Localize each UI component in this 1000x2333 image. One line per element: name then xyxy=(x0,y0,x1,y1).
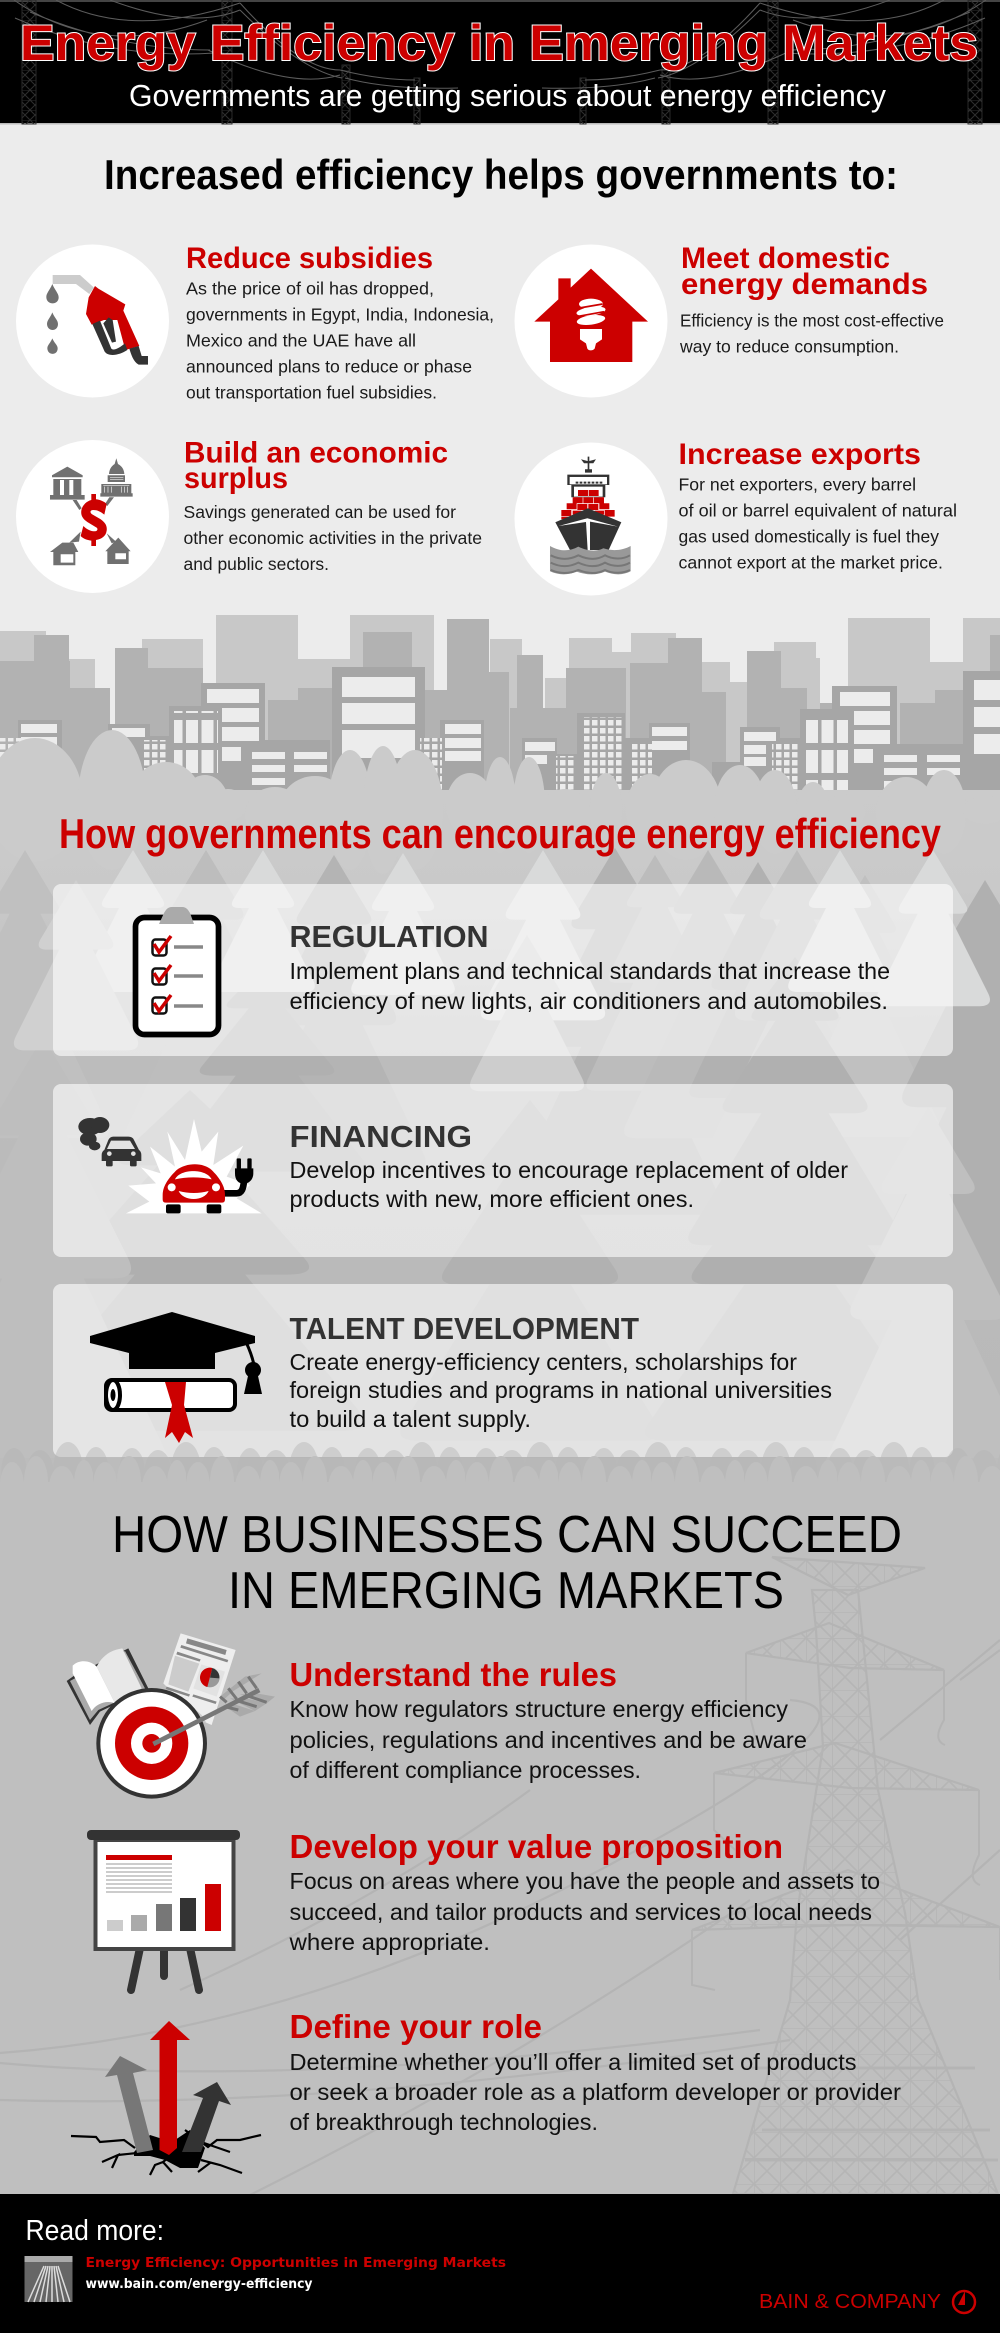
mid buildings xyxy=(0,619,1000,803)
body text xyxy=(184,502,482,574)
description: Create energy-efficiency centers, scholarships for xyxy=(290,1349,797,1375)
panel: financing xyxy=(53,1084,953,1257)
heading xyxy=(184,436,448,495)
pylon and power lines xyxy=(0,1557,1000,2195)
description xyxy=(290,1349,832,1432)
city skyline xyxy=(0,615,1000,805)
body text: Mexico and the UAE have all xyxy=(186,330,416,350)
body text: out transportation fuel subsidies. xyxy=(186,382,437,402)
background pine trees xyxy=(0,848,1000,1500)
heading: energy demands xyxy=(681,268,928,301)
body text: of oil or barrel equivalent of natural xyxy=(678,500,957,520)
icon: house with bulb xyxy=(514,244,668,398)
section heading: how businesses: IN EMERGING MARKETS xyxy=(228,1562,784,1620)
body text: Focus on areas where you have the people and assets to xyxy=(290,1868,880,1894)
icon: graduation cap xyxy=(90,1312,262,1443)
report url: www.bain.com/energy-efficiency xyxy=(86,2276,313,2292)
heading: Meet domestic xyxy=(681,242,890,275)
body text: where appropriate. xyxy=(288,1929,490,1955)
body text xyxy=(290,1696,807,1783)
report title: Energy Efficiency: Opportunities in Emerging Markets xyxy=(86,2255,506,2271)
read more label: Read more: xyxy=(26,2215,164,2247)
body text: Savings generated can be used for xyxy=(184,502,456,522)
heading: Reduce subsidies xyxy=(186,242,433,275)
body text xyxy=(288,1868,880,1955)
icon: money flows xyxy=(16,440,169,593)
description: Develop incentives to encourage replacement of older xyxy=(290,1157,848,1183)
icon: arrows breaking ground xyxy=(71,2021,261,2175)
description xyxy=(290,1157,848,1212)
section heading: increased efficiency: Increased efficiency helps governments to: xyxy=(104,151,898,198)
body text: of breakthrough technologies. xyxy=(290,2109,598,2135)
body text: cannot export at the market price. xyxy=(678,552,943,572)
body text xyxy=(186,278,494,402)
body text: gas used domestically is fuel they xyxy=(678,526,939,546)
label: FINANCING xyxy=(290,1119,472,1154)
near buildings xyxy=(0,667,1000,802)
header pylons xyxy=(14,0,986,124)
body text: succeed, and tailor products and services to local needs xyxy=(290,1899,872,1925)
panel: build an economic surplus xyxy=(16,436,482,593)
panel: reduce subsidies xyxy=(16,242,494,402)
body text: other economic activities in the private xyxy=(184,528,482,548)
label: REGULATION xyxy=(290,919,488,954)
section: businesses background xyxy=(0,1440,1000,2195)
tree line silhouette xyxy=(0,730,1000,874)
description: Implement plans and technical standards that increase the xyxy=(290,958,890,984)
description: to build a talent supply. xyxy=(290,1406,531,1432)
footer xyxy=(0,2194,1000,2333)
icon: presentation board xyxy=(87,1830,240,1990)
body text: and public sectors. xyxy=(184,554,329,574)
body text xyxy=(290,2049,901,2135)
panel: talent development xyxy=(53,1284,953,1457)
panel: increase exports xyxy=(514,438,957,596)
icon: cargo ship xyxy=(514,442,668,596)
body text xyxy=(679,310,944,356)
description: products with new, more efficient ones. xyxy=(290,1186,694,1212)
section heading: how businesses: HOW BUSINESSES CAN SUCCEED xyxy=(112,1506,902,1564)
block: define your role xyxy=(71,2008,901,2175)
windows xyxy=(0,677,1000,801)
section heading: how businesses xyxy=(112,1506,902,1620)
heading xyxy=(681,242,928,301)
body text: Efficiency is the most cost-effective xyxy=(680,310,944,330)
icon: clipboard xyxy=(136,907,218,1034)
subtitle: Governments are getting serious about energy efficiency xyxy=(129,78,886,113)
description xyxy=(290,958,890,1014)
header band xyxy=(0,0,1000,124)
heading: Increase exports xyxy=(678,438,921,471)
block: understand the rules xyxy=(67,1633,807,1797)
panel: regulation xyxy=(53,884,953,1056)
section: governments background xyxy=(0,730,1000,1500)
heading: Develop your value proposition xyxy=(290,1828,783,1865)
body text: of different compliance processes. xyxy=(290,1757,641,1783)
panel: meet domestic energy demands xyxy=(514,242,944,398)
block: develop your value proposition xyxy=(87,1828,880,1990)
description: efficiency of new lights, air conditioners and automobiles. xyxy=(290,988,888,1014)
logo: Bain & Company: BAIN & COMPANY xyxy=(759,2291,941,2313)
body text: policies, regulations and incentives and be aware xyxy=(290,1727,807,1753)
body text xyxy=(678,474,957,572)
description: foreign studies and programs in national universities xyxy=(290,1377,832,1403)
body text: Know how regulators structure energy efficiency xyxy=(290,1696,789,1722)
body text: or seek a broader role as a platform developer or provider xyxy=(290,2079,901,2105)
heading: surplus xyxy=(184,462,288,495)
far buildings xyxy=(0,615,1000,805)
thumbnail: pipeline photo xyxy=(24,2256,72,2302)
icon: target with book and report xyxy=(67,1633,275,1797)
body text: Determine whether you’ll offer a limited set of products xyxy=(290,2049,856,2075)
body text: announced plans to reduce or phase xyxy=(186,356,472,376)
icon: cars xyxy=(78,1117,262,1213)
body text: governments in Egypt, India, Indonesia, xyxy=(186,304,494,324)
label: TALENT DEVELOPMENT xyxy=(290,1311,639,1346)
title: Energy Efficiency in Emerging Markets xyxy=(20,15,978,71)
body text: way to reduce consumption. xyxy=(679,336,899,356)
icon: fuel pump xyxy=(16,244,169,398)
body text: As the price of oil has dropped, xyxy=(186,278,434,298)
heading: Build an economic xyxy=(184,436,448,470)
heading: Understand the rules xyxy=(290,1656,617,1693)
body text: For net exporters, every barrel xyxy=(678,474,916,494)
heading: Define your role xyxy=(290,2008,542,2045)
